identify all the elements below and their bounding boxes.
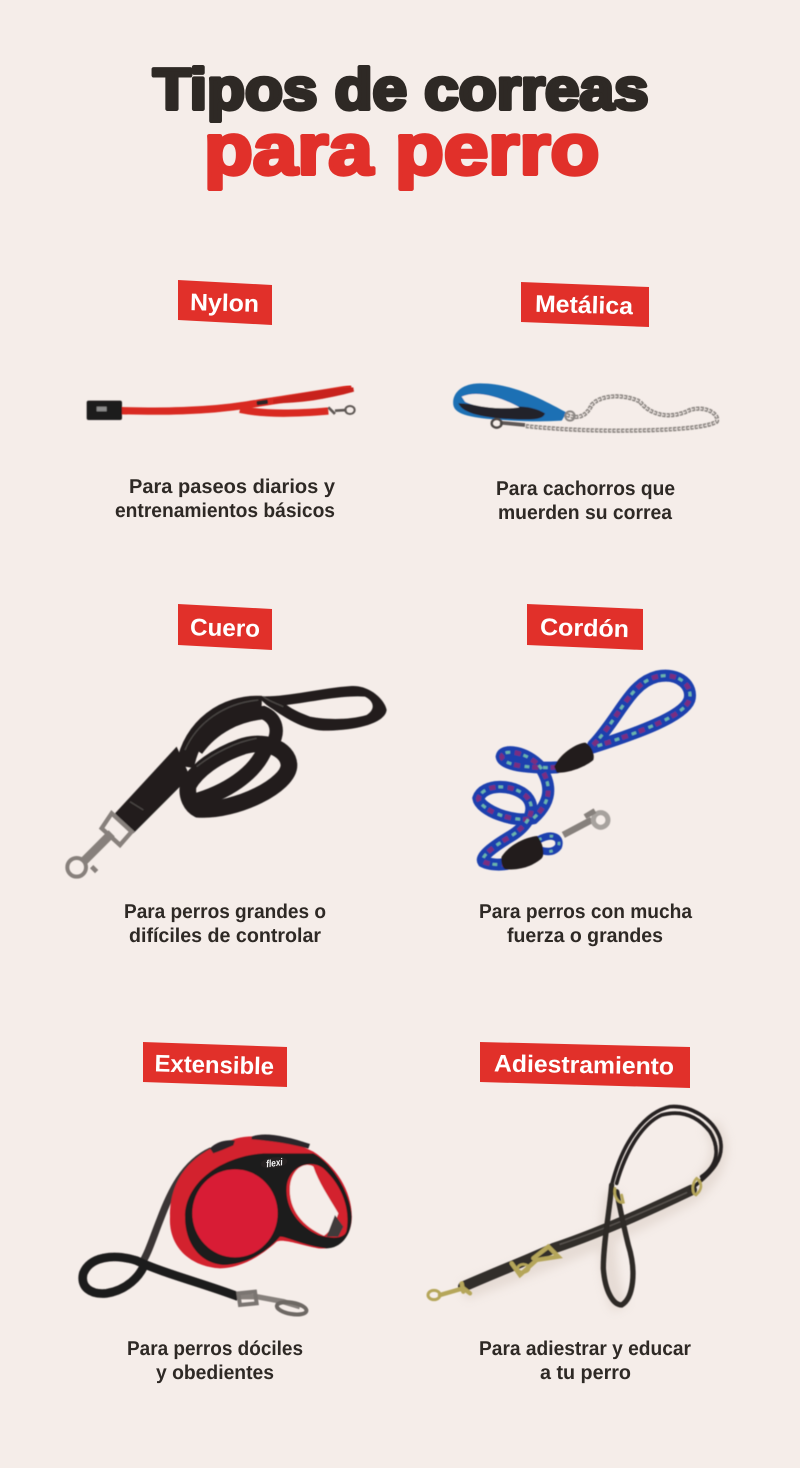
illustration: training leash [428,1107,721,1308]
illustration: chain leash [453,383,717,431]
title line 1: Tipos de correas [153,57,649,122]
panel: Cordón [478,604,693,947]
description: Extensible [127,1338,303,1384]
description: Cordón: Para perros con mucha [479,901,693,923]
illustration: red nylon leash [87,387,355,420]
description: Nylon [115,476,336,522]
tag: Nylon [178,280,272,325]
description: Nylon: Para paseos diarios y [129,476,336,498]
handle loop [257,686,387,731]
tag: Adiestramiento: Adiestramiento [494,1050,674,1081]
tag: Nylon: Nylon [190,289,259,318]
tag: Cuero: Cuero [190,614,260,643]
tag: Adiestramiento [480,1042,690,1088]
tag: Cuero [178,604,272,650]
panel: Metálica [453,282,717,524]
illustration: leather leash [67,686,387,877]
description: Cordón [479,901,693,947]
description: Extensible: Para perros dóciles [127,1338,303,1360]
coiled bands [130,697,289,810]
tag: Extensible [143,1042,287,1087]
description: Metálica [496,478,675,524]
tag: Cordón [527,604,643,650]
illustration: retractable leash [83,1134,352,1316]
brand logo text: flexi [265,1156,284,1170]
panel: Cuero [67,604,387,947]
description: Adiestramiento: a tu perro [540,1362,631,1384]
straight strap [115,747,190,833]
description: Cordón: fuerza o grandes [507,925,663,947]
title [153,57,649,190]
tag: Cordón: Cordón [540,614,629,643]
tag: Metálica [521,282,649,327]
panel: Adiestramiento [428,1042,721,1384]
illustration: blue rope leash [478,676,690,869]
panel: Nylon [87,280,355,522]
title line 2: para perro [204,110,599,190]
description: Extensible: y obedientes [156,1362,274,1384]
tag: Metálica: Metálica [535,291,634,320]
description: Nylon: entrenamientos básicos [115,500,335,522]
tag: Extensible: Extensible [154,1050,274,1081]
description: Adiestramiento [479,1338,691,1384]
description: Cuero: Para perros grandes o [124,901,326,923]
panel: Extensible [83,1042,352,1384]
description: Cuero [124,901,326,947]
description: Cuero: difíciles de controlar [129,925,321,947]
description: Metálica: Para cachorros que [496,478,675,500]
description: Metálica: muerden su correa [498,502,673,524]
description: Adiestramiento: Para adiestrar y educar [479,1338,691,1360]
